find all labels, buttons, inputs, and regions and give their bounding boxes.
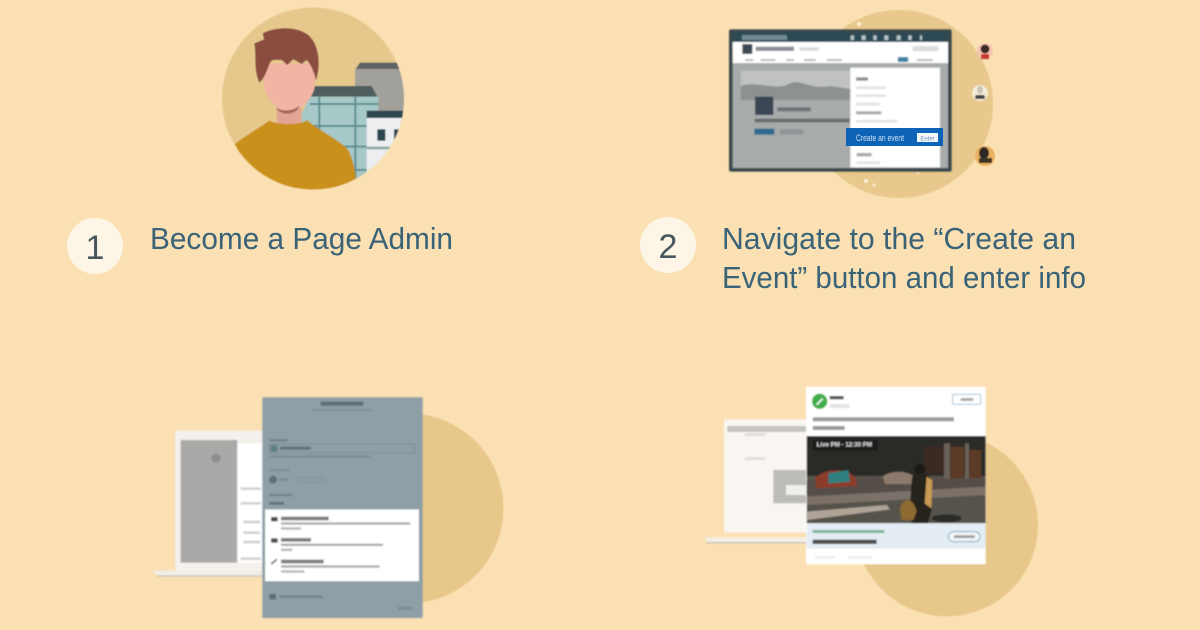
icon: grey building	[354, 62, 404, 112]
background circle	[855, 434, 1038, 616]
menu: event options	[265, 509, 419, 581]
heading: step 2	[722, 221, 1086, 295]
panel: step 2 illustration	[729, 10, 995, 198]
background circle	[805, 10, 993, 198]
step number 1: 1	[86, 229, 104, 267]
step number 2	[640, 217, 696, 273]
callout: create an event	[846, 128, 943, 146]
heading: step 2: Navigate to the “Create an	[722, 221, 1076, 256]
callout: create an event: Enter	[920, 136, 935, 142]
step number 2: 2	[659, 228, 677, 266]
icon: glass building	[302, 86, 378, 187]
card: event post: Live PM · 12:30 PM	[817, 442, 872, 449]
card: event post	[806, 387, 986, 564]
icon: avatar grey	[972, 85, 988, 101]
screenshot: company page	[729, 29, 952, 172]
icon: avatar dark	[975, 146, 995, 166]
icon: person	[235, 28, 356, 197]
laptop	[153, 431, 268, 577]
panel: step 3 illustration	[153, 397, 503, 618]
icon: white building	[366, 110, 404, 172]
callout: create an event: Create an event	[856, 133, 904, 144]
panel: step 4 illustration	[705, 387, 1038, 616]
dialog: event form	[262, 397, 423, 618]
decorative dots and orbit	[857, 22, 919, 186]
photo: street scene	[807, 436, 986, 523]
heading: step 1: Become a Page Admin	[150, 221, 453, 256]
icon: avatar red	[977, 43, 993, 59]
laptop	[705, 419, 811, 543]
heading: step 2: Event” button and enter info	[722, 260, 1086, 295]
panel: step 1 illustration	[222, 8, 407, 197]
step number 1	[67, 218, 123, 274]
background circle	[313, 413, 503, 603]
